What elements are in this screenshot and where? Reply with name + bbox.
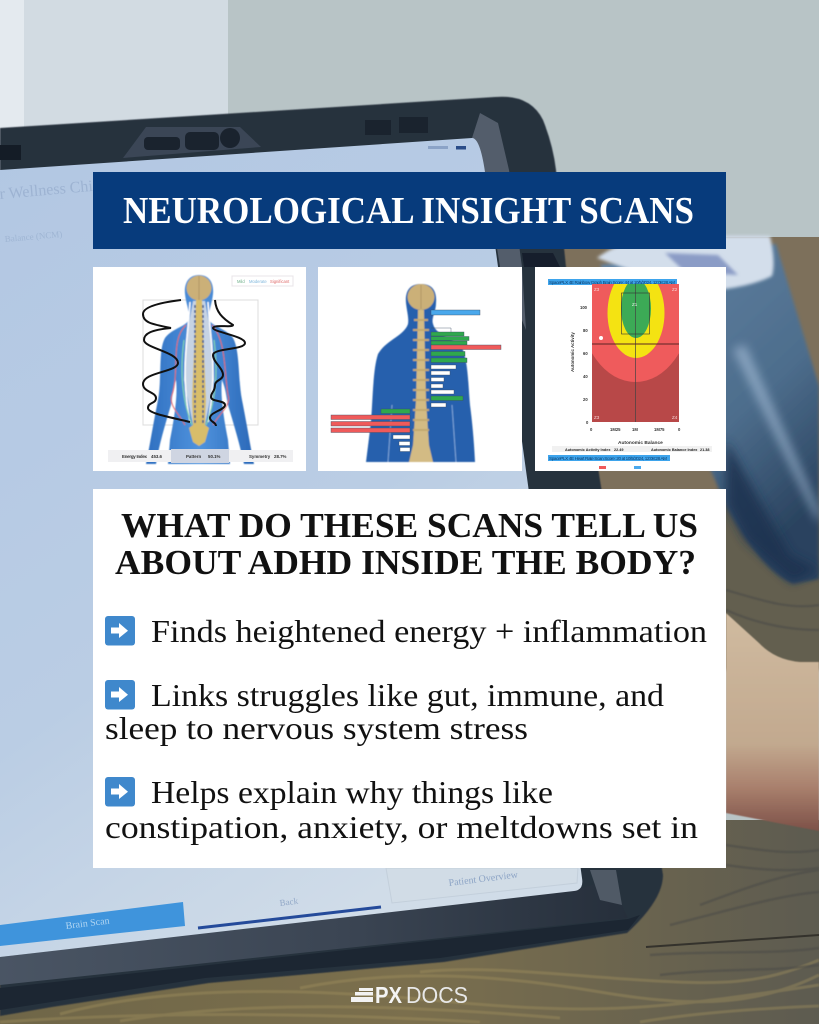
screen (0, 138, 582, 957)
axes: 1M25 (610, 427, 621, 432)
tablet inner wedge (472, 113, 526, 330)
background photo: tablet on wooden desk: Back (279, 896, 299, 908)
heat map header: SpacePLX 4E Rainbow Graph Brain Score: 44 at 10/5/2024, 12:08:28 AM (549, 280, 675, 285)
energy trace left (143, 300, 190, 422)
metric bar: 453.6 (151, 454, 163, 459)
icon: right arrow (105, 616, 135, 646)
axes: 0 (590, 427, 593, 432)
bullet 3: Helps explain why things like (151, 774, 553, 810)
metric bar: Symmetry (249, 454, 271, 459)
panel: spine thermal bar scan (318, 267, 522, 471)
icon: right arrow (105, 680, 135, 710)
wall (0, 0, 819, 300)
quadrant labels: Z4 (672, 415, 678, 420)
metric row: Autonomic Balance Index (651, 448, 698, 452)
legend (232, 276, 293, 286)
torso figure (366, 284, 475, 462)
heat map (592, 284, 679, 422)
quadrant labels: Z3 (594, 415, 600, 420)
legend: Mild (237, 279, 245, 284)
quadrant labels: Z2 (672, 287, 678, 292)
bars right side (431, 310, 501, 407)
status bar (456, 146, 466, 150)
bullet 2 (105, 677, 664, 746)
logo: PX DOCS: DOCS (406, 982, 468, 1008)
blue device on desk (597, 236, 819, 584)
metric row: 22.49 (614, 448, 624, 452)
heading (115, 506, 698, 582)
axes: 0 (586, 420, 589, 425)
axes: 1M75 (654, 427, 665, 432)
heading: WHAT DO THESE SCANS TELL US (121, 506, 698, 545)
bullet 2: Links struggles like gut, immune, and (151, 677, 664, 713)
background photo: tablet on wooden desk: Patient Overview (448, 869, 519, 889)
bullet 3: constipation, anxiety, or meltdowns set in (105, 809, 698, 845)
metric bar: Energy Index (122, 454, 148, 459)
quadrant labels: Z1 (632, 302, 638, 307)
metric row: 21.38 (700, 448, 710, 452)
axes: 40 (583, 374, 588, 379)
body figure back view (146, 275, 254, 464)
logo wordmark: PX (375, 982, 403, 1008)
metric row (552, 446, 712, 452)
title banner (93, 172, 726, 249)
axes (570, 305, 681, 446)
bars left side (331, 409, 410, 452)
spine (189, 300, 209, 446)
chart frame (143, 300, 258, 425)
energy trace right (210, 300, 245, 426)
axes: 80 (583, 328, 588, 333)
background photo: tablet on wooden desk: Brain Scan (65, 916, 110, 932)
metric bar (108, 449, 293, 463)
metric bar: Pattern (186, 454, 201, 459)
screen buttons (0, 902, 185, 946)
tablet speaker cutouts (123, 127, 261, 158)
axes: Autonomic Balance (618, 440, 663, 446)
axes: Autonomic Activity (570, 332, 575, 372)
metric row: Autonomic Activity Index (565, 448, 611, 452)
metric bar: 28.7% (274, 454, 287, 459)
axes: 60 (583, 351, 588, 356)
tablet case (0, 97, 663, 1016)
quadrant labels (594, 287, 678, 420)
background photo: tablet on wooden desk: Balance (NCM) (4, 229, 63, 244)
quadrant labels: Z3 (594, 287, 600, 292)
panel: questions and findings (93, 489, 726, 868)
icon: right arrow (105, 777, 135, 806)
nerve channel (184, 301, 214, 438)
legend: Significant (270, 279, 290, 284)
panel: spine energy scan (93, 267, 306, 471)
axes: 0 (678, 427, 681, 432)
axes: 1M (632, 427, 638, 432)
heading: ABOUT ADHD INSIDE THE BODY? (115, 543, 696, 582)
screen text: r Wellness Chi (0, 178, 94, 203)
hand (726, 613, 819, 831)
skull (408, 284, 434, 310)
legend swatches (599, 466, 606, 469)
metric bar: 50.1% (208, 454, 221, 459)
title: NEUROLOGICAL INSIGHT SCANS (123, 190, 694, 232)
bullet 2: sleep to nervous system stress (105, 710, 528, 746)
legend: Moderate (249, 279, 267, 284)
spine column (409, 310, 433, 462)
bullet 1: Finds heightened energy + inflammation (151, 613, 707, 649)
axes: 100 (580, 305, 588, 310)
brain (186, 276, 212, 300)
axes: 20 (583, 397, 588, 402)
logo: PX DOCS (351, 982, 468, 1008)
wood desk (0, 237, 819, 1024)
panel: autonomic heat map (535, 226, 726, 471)
logo stair icon (351, 988, 373, 1002)
bullet 3 (105, 774, 698, 845)
footer header: SpacePLX 4E Heart Rate Scan Score: 20 at 10/5/2024, 12:08:28 AM (549, 456, 667, 461)
